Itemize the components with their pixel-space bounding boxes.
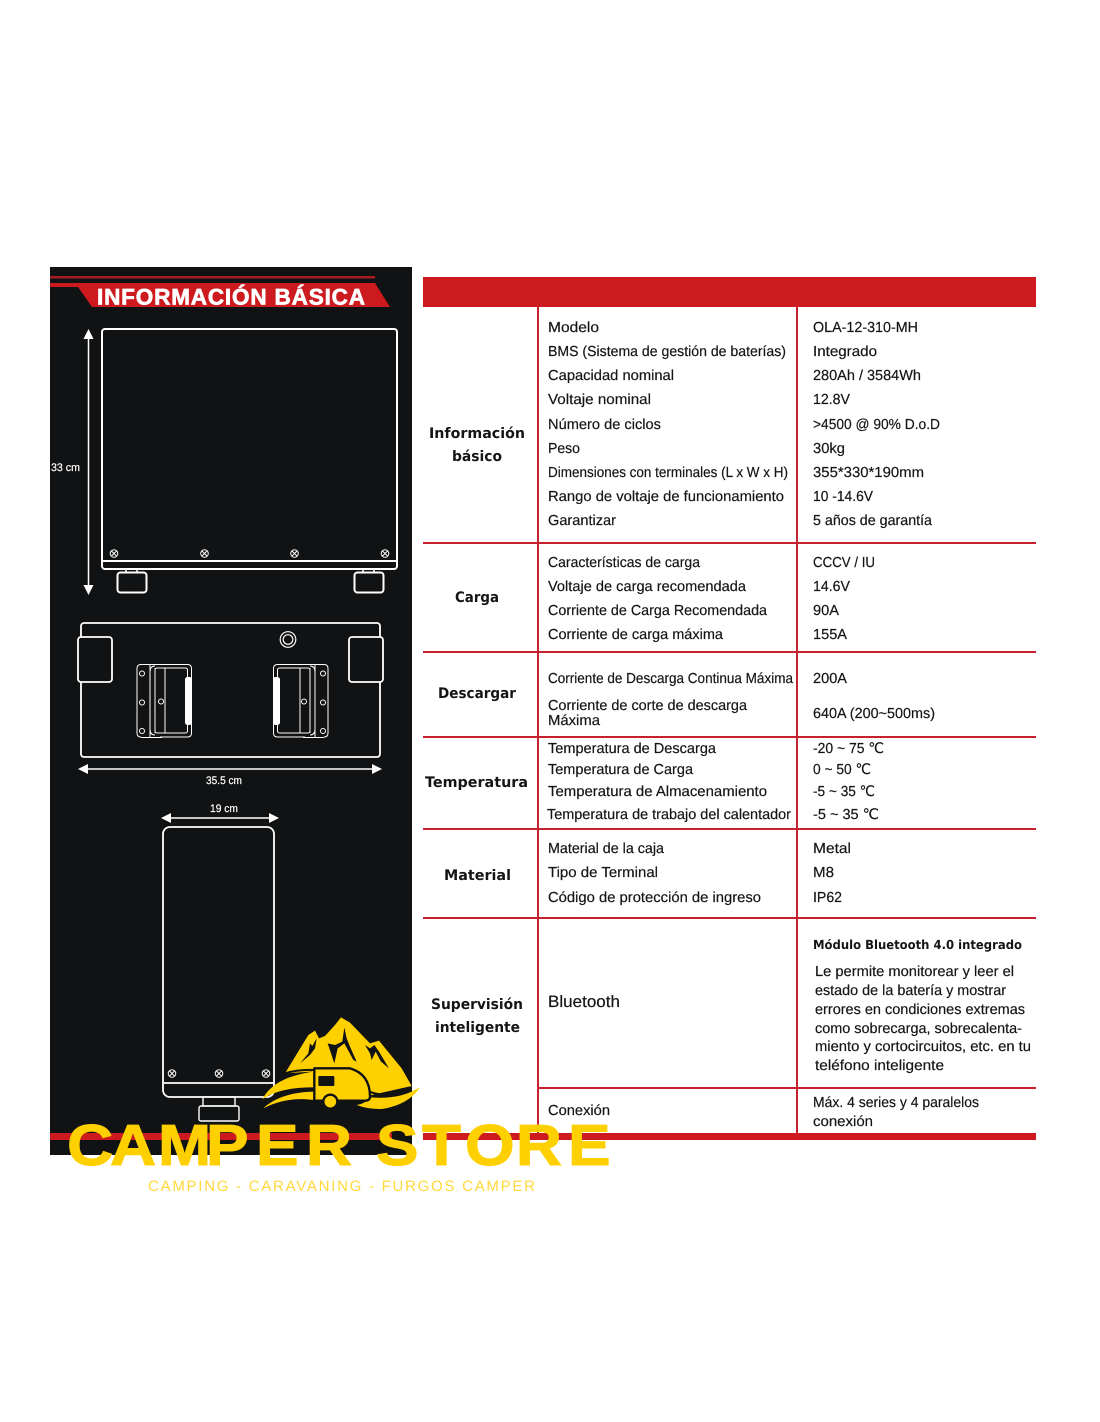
row: temperatura: Temperatura de Descarga	[548, 741, 717, 757]
row: material	[444, 841, 851, 906]
row: información básico: 30kg	[813, 441, 845, 457]
row: información básico: Número de ciclos	[548, 417, 661, 433]
row: carga: 90A	[813, 603, 839, 619]
row: supervisión inteligente: teléfono inteligente	[815, 1058, 944, 1074]
row: temperatura: -20 ~ 75 ℃	[813, 741, 884, 757]
icon: mountain and caravan	[262, 1017, 420, 1109]
row: supervisión inteligente: inteligente	[435, 1020, 520, 1036]
arrow: depth 19 cm	[161, 803, 279, 823]
row: información básico: >4500 @ 90% D.o.D	[813, 417, 940, 433]
row: información básico: 280Ah / 3584Wh	[813, 368, 921, 384]
row: información básico: 355*330*190mm	[813, 465, 924, 481]
row: material: M8	[813, 865, 834, 881]
row: descargar: Máxima	[548, 713, 601, 729]
row: información básico: 10 -14.6V	[813, 489, 873, 505]
row: carga: Carga	[455, 590, 499, 606]
row: supervisión inteligente: conexión	[813, 1114, 873, 1130]
row: carga: Corriente de Carga Recomendada	[548, 603, 768, 619]
row: material: Tipo de Terminal	[548, 865, 658, 881]
logo: camper store	[67, 1017, 611, 1195]
panel: specifications table	[423, 277, 1036, 1134]
row: material: Material	[444, 868, 511, 884]
diagram: top view	[78, 623, 383, 757]
row: descargar: Corriente de corte de descarga	[548, 698, 748, 714]
row: temperatura: Temperatura de trabajo del calentador	[547, 807, 791, 823]
arrow: width 35.5 cm	[78, 764, 382, 787]
row: temperatura	[425, 741, 884, 823]
row: carga: CCCV / IU	[813, 555, 875, 571]
row: información básico	[429, 320, 940, 529]
row: supervisión inteligente	[431, 937, 1031, 1130]
row: supervisión inteligente: Bluetooth	[548, 993, 620, 1011]
row: información básico: OLA-12-310-MH	[813, 320, 918, 336]
row: supervisión inteligente: estado de la batería y mostrar	[815, 983, 1006, 999]
row: supervisión inteligente: miento y cortocircuitos, etc. en tu	[815, 1039, 1031, 1055]
row: supervisión inteligente: Máx. 4 series y 4 paralelos	[813, 1095, 979, 1111]
row: temperatura: Temperatura	[425, 775, 528, 791]
row: supervisión inteligente: Supervisión	[431, 997, 523, 1013]
row: información básico: Capacidad nominal	[548, 368, 674, 384]
row: carga: 155A	[813, 627, 847, 643]
row: información básico: Garantizar	[548, 513, 616, 529]
row: supervisión inteligente: Conexión	[548, 1103, 610, 1119]
table grid lines	[423, 307, 1036, 1134]
logo tagline: CAMPING - CARAVANING - FURGOS CAMPER	[148, 1178, 535, 1195]
row: descargar: 200A	[813, 671, 847, 687]
row: descargar: 640A (200~500ms)	[813, 706, 935, 722]
row: material: Material de la caja	[548, 841, 665, 857]
row: temperatura: -5 ~ 35 ℃	[813, 784, 875, 800]
row: carga: 14.6V	[813, 579, 850, 595]
arrow: depth 19 cm: 19 cm	[210, 803, 238, 815]
row: supervisión inteligente: errores en condiciones extremas	[815, 1002, 1025, 1018]
row: temperatura: -5 ~ 35 ℃	[813, 807, 879, 823]
panel: dimensions	[50, 267, 412, 1155]
arrow: height 33 cm: 33 cm	[51, 462, 80, 474]
row: información básico: BMS (Sistema de gestión de baterías)	[548, 344, 786, 360]
arrow: height 33 cm	[51, 329, 94, 595]
row: temperatura: Temperatura de Carga	[548, 762, 694, 778]
arrow: width 35.5 cm: 35.5 cm	[206, 775, 242, 787]
row: carga	[455, 555, 875, 643]
diagram: front view	[102, 329, 397, 592]
row: carga: Corriente de carga máxima	[548, 627, 724, 643]
heading banner: información básica	[50, 276, 390, 310]
row: carga: Características de carga	[548, 555, 701, 571]
row: supervisión inteligente: Le permite monitorear y leer el	[815, 964, 1014, 980]
row: temperatura: 0 ~ 50 ℃	[813, 762, 871, 778]
row: supervisión inteligente: como sobrecarga, sobrecalenta-	[815, 1021, 1022, 1037]
row: material: IP62	[813, 890, 842, 906]
row: información básico: 12.8V	[813, 392, 850, 408]
row: información básico: 5 años de garantía	[813, 513, 933, 529]
row: información básico: básico	[452, 449, 502, 465]
row: material: Código de protección de ingreso	[548, 890, 761, 906]
row: material: Metal	[813, 841, 851, 857]
row: temperatura: Temperatura de Almacenamiento	[548, 784, 767, 800]
row: descargar: Corriente de Descarga Continua Máxima	[548, 671, 794, 687]
row: descargar: Descargar	[438, 686, 517, 702]
icon: right handle	[273, 664, 328, 738]
row: carga: Voltaje de carga recomendada	[548, 579, 747, 595]
row: información básico: Información	[429, 426, 525, 442]
logo wordmark: CAMPER STORE	[67, 1113, 611, 1178]
row: información básico: Integrado	[813, 344, 877, 360]
table bottom rule	[50, 1133, 1036, 1140]
icon: left handle	[137, 664, 192, 738]
row: información básico: Rango de voltaje de funcionamiento	[548, 489, 784, 505]
row: información básico: Modelo	[548, 320, 599, 336]
row: supervisión inteligente: Módulo Bluetooth 4.0 integrado	[813, 937, 1022, 952]
heading banner: información básica: INFORMACIÓN BÁSICA	[97, 284, 365, 310]
row: información básico: Voltaje nominal	[548, 392, 651, 408]
row: descargar	[438, 671, 935, 729]
row: información básico: Dimensiones con terminales (L x W x H)	[548, 465, 788, 481]
row: información básico: Peso	[548, 441, 580, 457]
table header bar	[423, 277, 1036, 307]
diagram: side view	[163, 827, 274, 1121]
